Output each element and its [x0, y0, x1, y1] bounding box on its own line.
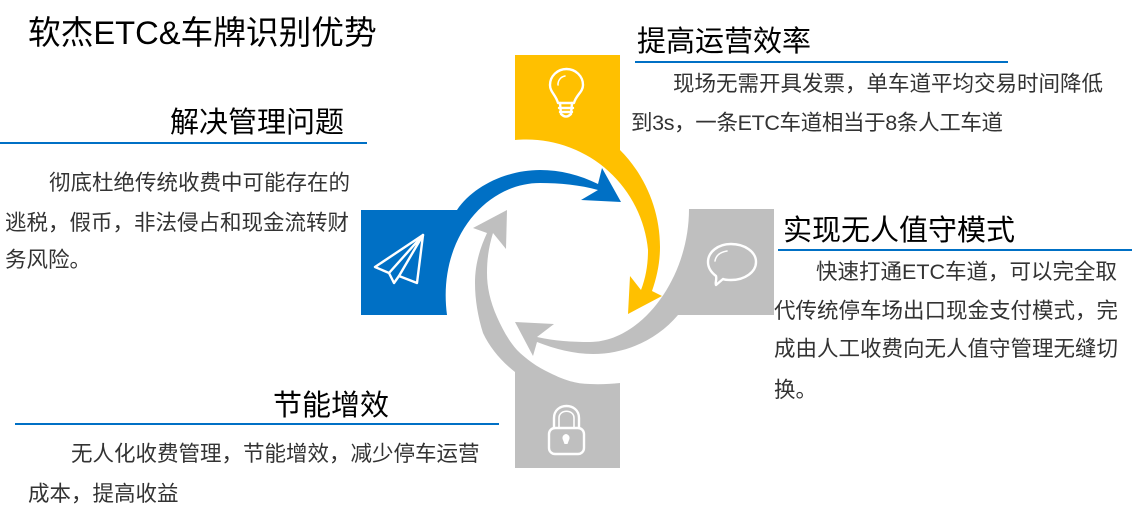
panel: energy saving text [28, 390, 480, 506]
icon: light bulb [550, 69, 583, 116]
body text: management: 逃税，假币，非法侵占和现金流转财 [5, 211, 349, 235]
body text: unattended: 代传统停车场出口现金支付模式，完 [774, 299, 1118, 323]
title: 软杰ETC&车牌识别优势 [28, 14, 377, 51]
heading: energy saving: 节能增效 [273, 390, 389, 422]
heading: efficiency: 提高运营效率 [637, 26, 811, 58]
body text: energy saving: 无人化收费管理，节能增效，减少停车运营 [71, 442, 480, 466]
body text: unattended: 换。 [774, 378, 817, 402]
icon: padlock [549, 406, 584, 454]
heading: management: 解决管理问题 [170, 107, 344, 139]
body text: energy saving: 成本，提高收益 [28, 482, 179, 506]
body text: efficiency: 现场无需开具发票，单车道平均交易时间降低 [673, 72, 1103, 96]
panel: efficiency text [631, 26, 1103, 135]
panel: grey bottom tile with arc arrow [473, 210, 620, 468]
body text: efficiency: 到3s，一条ETC车道相当于8条人工车道 [631, 111, 1003, 135]
heading: unattended: 实现无人值守模式 [783, 215, 1015, 247]
panel: yellow tile with arc arrow [515, 55, 662, 314]
panel: grey right tile with arc arrow [515, 209, 774, 356]
body text: unattended [774, 260, 1118, 402]
body text: unattended: 成由人工收费向无人值守管理无缝切 [774, 337, 1118, 361]
body text: energy saving [28, 442, 480, 506]
body text: unattended: 快速打通ETC车道，可以完全取 [816, 260, 1117, 284]
panel: blue tile with arc arrow [361, 168, 621, 315]
panel: management text [5, 107, 350, 272]
panel: unattended text [774, 215, 1118, 402]
icon: paper plane [375, 235, 423, 283]
body text: management: 彻底杜绝传统收费中可能存在的 [49, 171, 350, 195]
body text: efficiency [631, 72, 1103, 135]
icon: keyhole [562, 434, 570, 444]
body text: management: 务风险。 [5, 248, 91, 272]
icon: speech bubble [708, 244, 756, 285]
body text: management [5, 171, 350, 272]
